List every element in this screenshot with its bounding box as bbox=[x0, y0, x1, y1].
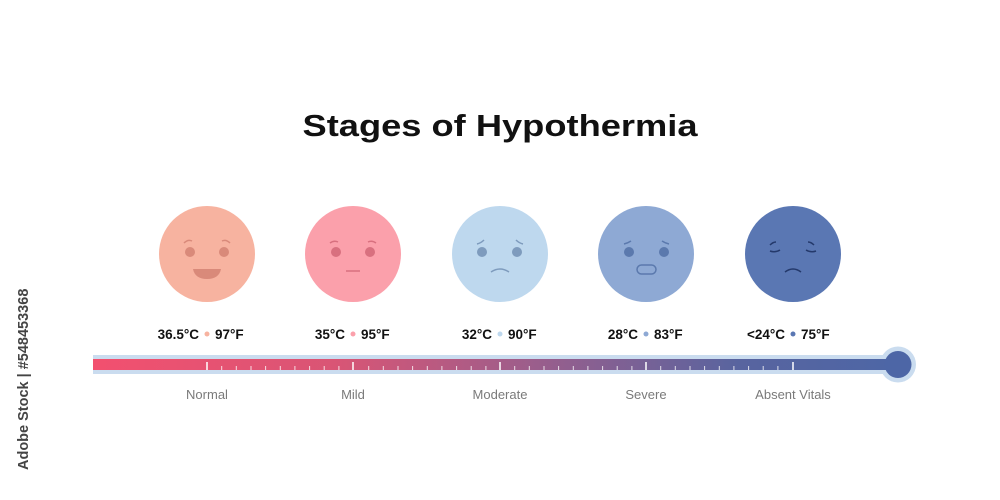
watermark id: Adobe Stock | #548453368 bbox=[16, 289, 32, 470]
stage labels: Absent Vitals bbox=[755, 387, 831, 402]
temperatures: <24°C bbox=[747, 327, 785, 342]
temperatures: 28°C bbox=[608, 327, 638, 342]
temperatures: 36.5°C bbox=[158, 327, 199, 342]
stage labels: Mild bbox=[341, 387, 365, 402]
temperatures: 90°F bbox=[508, 327, 537, 342]
temperatures bbox=[158, 327, 830, 342]
temperatures: 75°F bbox=[801, 327, 830, 342]
temperatures: 97°F bbox=[215, 327, 244, 342]
title: Stages of Hypothermia bbox=[302, 108, 698, 143]
temperatures: 95°F bbox=[361, 327, 390, 342]
stage labels: Moderate bbox=[473, 387, 527, 402]
stage labels: Severe bbox=[625, 387, 667, 402]
temperatures: 32°C bbox=[462, 327, 492, 342]
face: normal bbox=[159, 206, 255, 302]
temperatures: 83°F bbox=[654, 327, 683, 342]
thermometer bar bbox=[93, 346, 916, 382]
stage labels bbox=[186, 387, 831, 402]
face: mild bbox=[305, 206, 401, 302]
stage labels: Normal bbox=[186, 387, 228, 402]
face: moderate bbox=[452, 206, 548, 302]
face: absent vitals bbox=[745, 206, 841, 302]
face: severe bbox=[598, 206, 694, 302]
temperatures: 35°C bbox=[315, 327, 345, 342]
